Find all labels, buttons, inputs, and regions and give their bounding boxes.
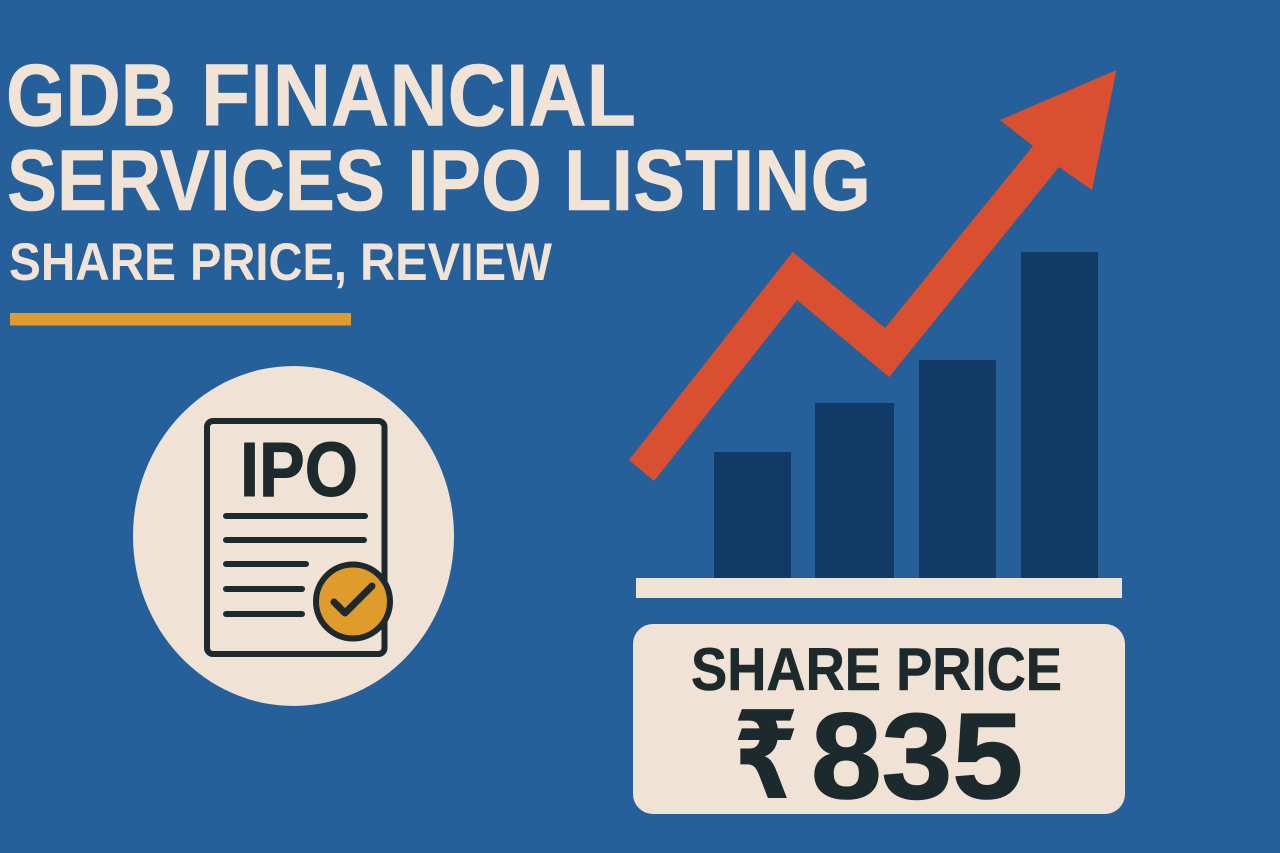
callout panel (633, 624, 1125, 814)
title: main heading: FINANCIAL (201, 46, 636, 144)
title: main heading: LISTING (564, 133, 871, 229)
subtitle (9, 233, 552, 292)
accent underline (10, 313, 351, 326)
icon: IPO document badge (133, 366, 454, 706)
arrow: rising trend (629, 70, 1116, 481)
document outline (207, 421, 384, 654)
chart baseline shelf (636, 578, 1122, 598)
title: main heading: IPO (407, 133, 542, 229)
callout: share price (633, 624, 1125, 827)
subtitle: PRICE, (190, 233, 347, 292)
title: main heading: GDB (6, 46, 176, 144)
icon: check badge (316, 564, 390, 638)
document label: IPO (240, 427, 358, 513)
bar chart (714, 252, 1098, 579)
callout label: SHARE PRICE (691, 636, 1062, 703)
subtitle: REVIEW (360, 233, 552, 292)
document text lines (226, 516, 365, 614)
title: main heading (6, 46, 871, 229)
title: main heading: SERVICES (7, 133, 385, 229)
badge circle (133, 366, 454, 706)
rupee symbol: ₹ (733, 685, 799, 827)
price value: 835 (811, 688, 1023, 824)
subtitle: SHARE (9, 233, 176, 292)
